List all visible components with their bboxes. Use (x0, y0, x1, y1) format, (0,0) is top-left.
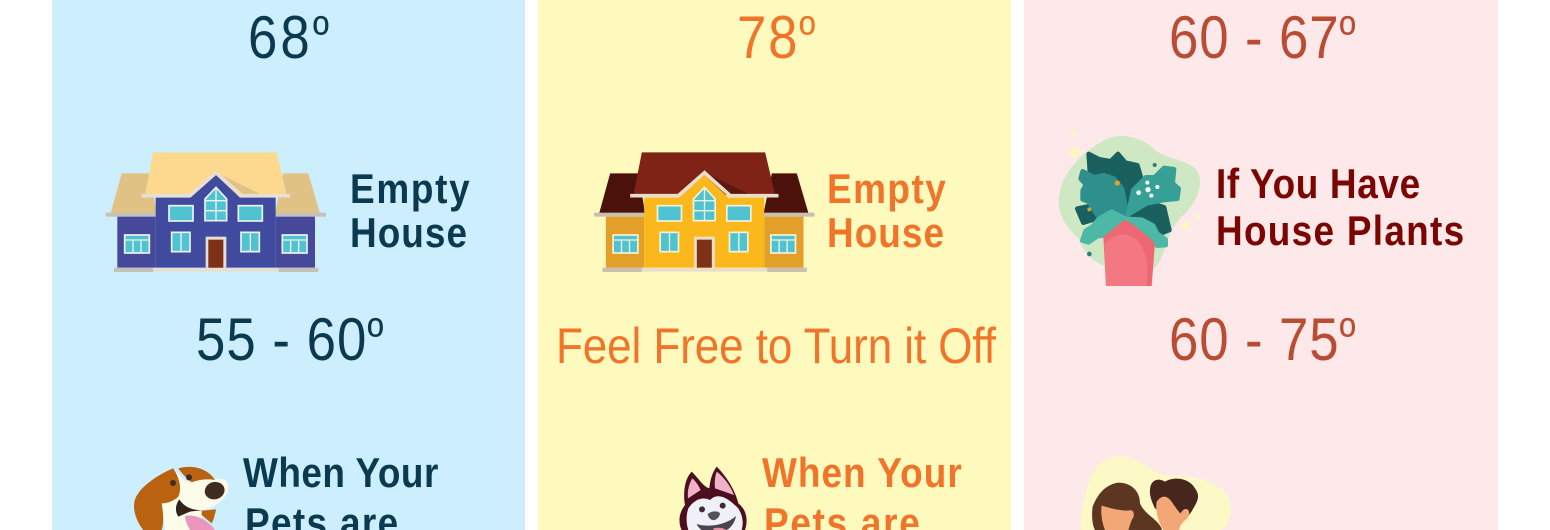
temperature: 60 to 67 degrees: 60 - 67 (1169, 4, 1339, 71)
panel: yellow column (538, 0, 1011, 530)
temperature: 55 to 60 degrees: 55 - 60 (196, 306, 366, 373)
icon: husky dog (679, 467, 747, 530)
temperature: 68 degrees: º (313, 5, 329, 62)
label: empty house: Empty (350, 166, 470, 213)
icon: couple (1081, 456, 1231, 530)
label: when your pets are (762, 450, 962, 530)
label: empty house: House (827, 210, 944, 257)
label: empty house (827, 166, 946, 257)
label: empty house: Empty (827, 166, 946, 213)
label: empty house (350, 166, 470, 257)
temperature: 78 degrees: 78 (737, 4, 797, 71)
label: if you have house plants: House Plants (1216, 208, 1464, 255)
icon: yellow house (594, 152, 814, 272)
text: feel free to turn it off: Feel Free to Turn it Off (556, 317, 997, 374)
label: if you have house plants: If You Have (1216, 161, 1420, 208)
icon: house plant (1059, 130, 1201, 286)
temperature: 60 to 75 degrees: 60 - 75 (1169, 306, 1339, 373)
temperature: 60 to 75 degrees: º (1339, 307, 1356, 364)
label: empty house: House (350, 210, 467, 257)
panel: pink column (1024, 0, 1498, 530)
label: if you have house plants (1216, 161, 1464, 255)
temperature: 68 degrees: 68 (248, 4, 310, 71)
dark back leaves (1077, 154, 1169, 233)
icon: blue house (106, 152, 326, 272)
panel: blue column (52, 0, 525, 530)
temperature: 60 to 67 degrees: º (1339, 5, 1356, 62)
label: when your pets are (243, 450, 438, 530)
teal middle leaves (1081, 171, 1127, 217)
light front leaves (1082, 211, 1166, 246)
label: when your pets are: When Your (243, 450, 438, 497)
temperature: 55 to 60 degrees: º (367, 307, 383, 364)
temperature: 78 degrees: º (799, 5, 815, 62)
label: when your pets are: When Your (762, 450, 962, 497)
icon: beagle dog (134, 467, 228, 530)
